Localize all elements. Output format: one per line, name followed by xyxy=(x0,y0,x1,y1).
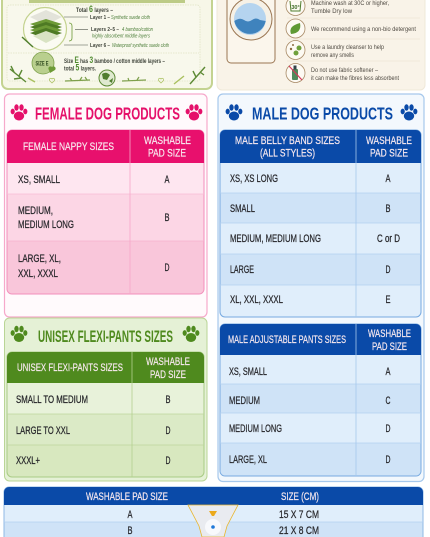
table: male adjustable pants sizes: LARGE, XL xyxy=(229,454,267,466)
text: total layers xyxy=(64,4,169,49)
text: size E note xyxy=(64,55,165,72)
icon: paw left xyxy=(11,326,27,342)
table: female nappy sizes: XXL, XXXL xyxy=(18,268,58,280)
table: unisex sizes: XXXL+ xyxy=(16,455,40,467)
table: unisex sizes xyxy=(7,352,204,477)
table: female nappy sizes: FEMALE NAPPY SIZES xyxy=(23,141,114,153)
icon: paw right xyxy=(401,104,417,120)
panel: unisex flexi-pants xyxy=(4,318,207,481)
text: cleanser: Use a laundry cleanser to help xyxy=(311,44,384,51)
panel: pad layers xyxy=(2,0,212,89)
icon: wash 30: 30° xyxy=(291,5,300,11)
text: no softener xyxy=(311,67,399,82)
table: male belly band sizes: WASHABLE xyxy=(366,135,412,147)
table: male belly band sizes: D xyxy=(386,264,391,276)
table: unisex sizes: SMALL TO MEDIUM xyxy=(16,394,88,406)
table: female nappy sizes: MEDIUM LONG xyxy=(18,219,74,231)
text: total layers: highly absorbent middle layers xyxy=(92,34,150,40)
text: size E note: Size E has 3 bamboo / cotton middle layers – xyxy=(64,55,165,65)
table: male belly band sizes: XL, XXL, XXXL xyxy=(230,294,283,306)
table: female nappy sizes: A xyxy=(164,174,170,186)
table: female nappy sizes: MEDIUM, xyxy=(18,205,53,217)
table: male belly band sizes xyxy=(220,130,421,317)
table: unisex sizes: UNISEX FLEXI-PANTS SIZES xyxy=(17,362,123,374)
icon: size E heart xyxy=(32,52,56,74)
text: total layers: Layer 6 – xyxy=(90,43,110,49)
table: male adjustable pants sizes: WASHABLE xyxy=(368,328,411,340)
table: male adjustable pants sizes: MALE ADJUSTABLE PANTS SIZES xyxy=(228,334,346,346)
table: male belly band sizes: C or D xyxy=(377,233,400,245)
table: pad dimensions: A xyxy=(128,509,133,521)
table: female nappy sizes: XS, SMALL xyxy=(18,174,60,186)
table: female nappy sizes: D xyxy=(164,262,170,274)
table: unisex sizes: LARGE TO XXL xyxy=(16,425,70,437)
table: pad dimensions: SIZE (CM) xyxy=(281,491,319,503)
table: unisex sizes: D xyxy=(166,455,171,467)
table: male adjustable pants sizes: MEDIUM xyxy=(229,395,260,407)
table: unisex sizes: D xyxy=(166,425,171,437)
table: male belly band sizes: E xyxy=(386,294,390,306)
heading: female: FEMALE DOG PRODUCTS xyxy=(35,104,180,124)
text: no softener: Do not use fabric softener – xyxy=(311,67,378,74)
text: total layers: Waterproof synthetic suede cloth xyxy=(112,43,169,49)
icon: dog nappy xyxy=(188,505,238,537)
text: cleanser xyxy=(311,44,384,59)
table: male belly band sizes: SMALL xyxy=(230,203,255,215)
icon: paw left xyxy=(226,104,242,120)
panel: female dog products xyxy=(4,94,207,317)
text: total layers: Synthetic suede cloth xyxy=(111,15,150,21)
icon: paw right xyxy=(183,326,199,342)
table: pad dimensions: 21 X 8 CM xyxy=(279,525,319,537)
table: male belly band sizes: LARGE xyxy=(230,264,254,276)
icon: no softener xyxy=(286,64,305,82)
table: female nappy sizes: LARGE, XL, xyxy=(18,253,61,265)
heading: unisex: UNISEX FLEXI-PANTS SIZES xyxy=(38,327,173,346)
table: pad dimensions xyxy=(4,487,423,537)
table: unisex sizes: WASHABLE xyxy=(146,356,190,368)
text: total layers: Total 6 layers – xyxy=(76,4,113,14)
table: pad dimensions: WASHABLE PAD SIZE xyxy=(86,491,168,503)
icon: cleanser xyxy=(286,40,305,60)
table: male belly band sizes: PAD SIZE xyxy=(370,148,408,160)
table: pad dimensions: 15 X 7 CM xyxy=(279,509,319,521)
text: no softener: it can make the fibres less absorbent xyxy=(311,75,399,82)
table: male adjustable pants sizes: C xyxy=(386,395,391,407)
table: pad dimensions: B xyxy=(128,525,132,537)
table: female nappy sizes: PAD SIZE xyxy=(148,148,186,160)
table: male adjustable pants sizes: PAD SIZE xyxy=(372,341,407,353)
panel: male dog products xyxy=(218,94,424,482)
text: machine wash: Machine wash at 30C or higher, xyxy=(311,0,389,7)
table: male belly band sizes: MALE BELLY BAND SIZES xyxy=(235,135,340,147)
table: male adjustable pants sizes: MEDIUM LONG xyxy=(229,423,282,435)
table: female nappy sizes xyxy=(7,130,204,294)
table: male belly band sizes: (ALL STYLES) xyxy=(260,148,315,160)
icon: layered pad xyxy=(22,8,66,50)
table: unisex sizes: PAD SIZE xyxy=(150,369,186,381)
icon: paw right xyxy=(186,104,202,120)
text: cleanser: remove any smells xyxy=(311,52,355,59)
table: male adjustable pants sizes: D xyxy=(386,423,391,435)
table: male adjustable pants sizes: XS, SMALL xyxy=(229,366,267,378)
icon: leaves and globe decoration xyxy=(10,66,205,86)
table: unisex sizes: B xyxy=(166,394,170,406)
table: male belly band sizes: XS, XS LONG xyxy=(230,173,278,185)
icon: leaf xyxy=(286,19,305,38)
table: male adjustable pants sizes xyxy=(220,324,421,476)
icon: washing machine xyxy=(227,0,275,63)
text: total layers: Layers 2–5 – xyxy=(91,27,119,33)
text: total layers: 4 bamboo/cotton xyxy=(122,27,153,33)
table: male belly band sizes: MEDIUM, MEDIUM LONG xyxy=(230,233,321,245)
icon: size E heart: SIZE E xyxy=(36,62,48,68)
table: male adjustable pants sizes: D xyxy=(386,454,391,466)
icon: paw left xyxy=(11,104,27,120)
table: male belly band sizes: B xyxy=(386,203,390,215)
table: female nappy sizes: WASHABLE xyxy=(144,135,191,147)
icon: wash 30 xyxy=(286,0,305,16)
text: size E note: total 5 layers. xyxy=(64,62,96,72)
table: male belly band sizes: A xyxy=(386,173,391,185)
table: female nappy sizes: B xyxy=(164,212,170,224)
text: tumble dry: Tumble Dry low xyxy=(311,8,352,15)
text: total layers: Layer 1 – xyxy=(90,15,110,21)
panel: wash care xyxy=(217,0,425,90)
table: male adjustable pants sizes: A xyxy=(386,366,391,378)
